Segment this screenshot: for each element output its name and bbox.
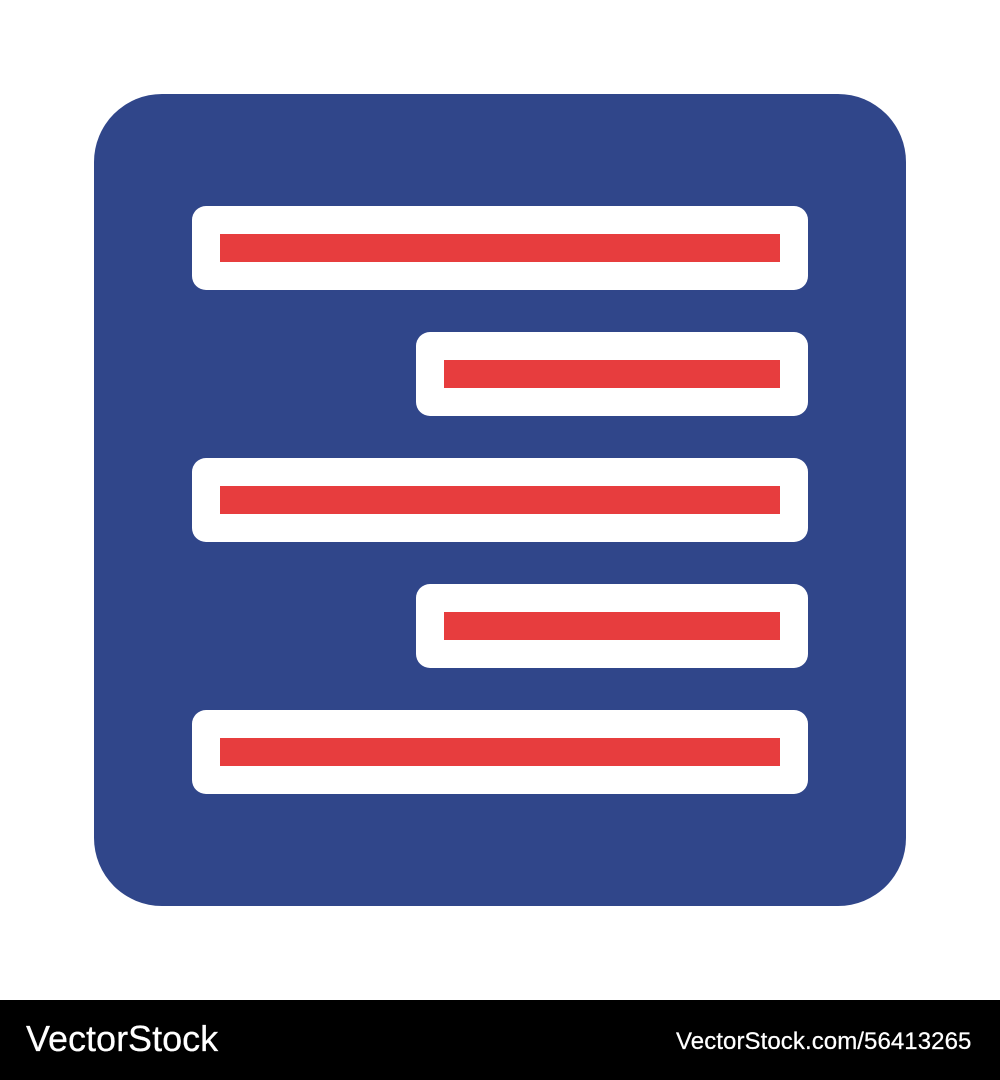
list row 4 [416,584,808,668]
image id: VectorStock.com/56413265 [676,1028,971,1055]
list row 2 [416,332,808,416]
brand name: VectorStock [26,1018,218,1059]
list row 5 [192,710,808,794]
list row 3 [192,458,808,542]
icon background panel [94,94,906,906]
footer watermark bar [0,1000,1000,1080]
list row 1 [192,206,808,290]
